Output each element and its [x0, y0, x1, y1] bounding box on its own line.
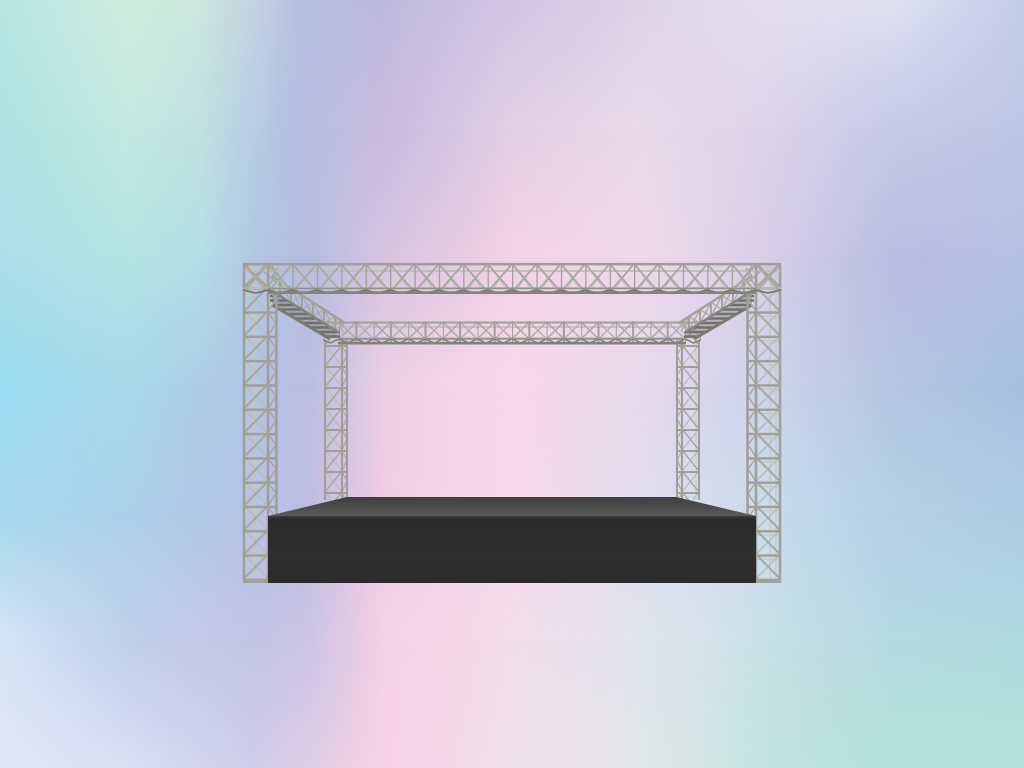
right diagonal side truss — [679, 266, 762, 339]
stage structure — [243, 263, 781, 583]
stage front face — [268, 516, 756, 583]
left front truss column — [243, 263, 278, 583]
rear truss beam — [323, 321, 701, 345]
stage deck top surface — [268, 497, 756, 516]
front truss beam — [243, 263, 781, 294]
left diagonal side truss — [262, 266, 345, 339]
right front truss column — [746, 263, 781, 583]
rear truss columns — [324, 340, 700, 500]
